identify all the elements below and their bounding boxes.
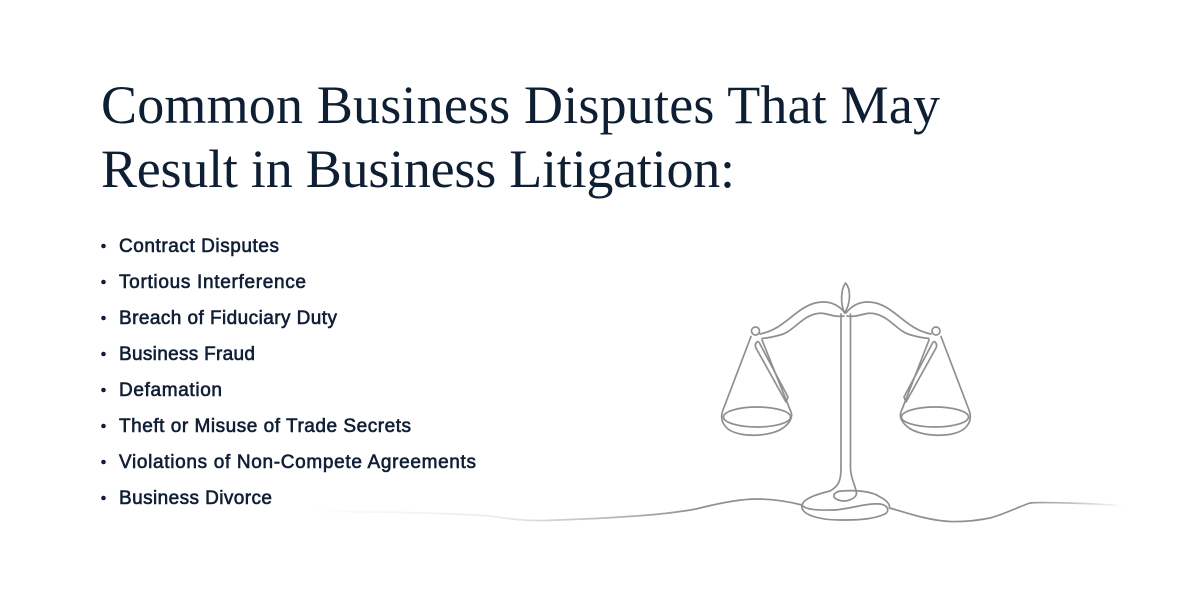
ground line fading right [1030, 503, 1125, 506]
list item: Theft or Misuse of Trade Secrets: Theft or Misuse of Trade Secrets [119, 416, 411, 437]
scale base with looped line [700, 491, 1030, 522]
right pan [900, 327, 970, 435]
ground line fading left [300, 508, 700, 521]
list item: Contract Disputes: Contract Disputes [119, 236, 279, 257]
title [101, 75, 940, 199]
list item: Tortious Interference: Tortious Interference [119, 272, 306, 293]
icon: line-art scales of justice [300, 283, 1125, 522]
left beam [760, 302, 845, 338]
list item: Violations of Non-Compete Agreements: Violations of Non-Compete Agreements [119, 452, 476, 473]
title: Result in Business Litigation: [101, 139, 735, 199]
list item: Breach of Fiduciary Duty: Breach of Fiduciary Duty [119, 308, 338, 329]
title: Common Business Disputes That May [101, 75, 940, 135]
list item: Business Divorce: Business Divorce [119, 488, 272, 509]
list item: Defamation: Defamation [119, 380, 222, 401]
left pan [722, 327, 792, 435]
bullet list of business disputes [101, 236, 476, 509]
list item: Business Fraud: Business Fraud [119, 344, 255, 365]
right beam [846, 302, 931, 338]
scale pommel [842, 283, 850, 313]
scale stem [830, 314, 856, 491]
